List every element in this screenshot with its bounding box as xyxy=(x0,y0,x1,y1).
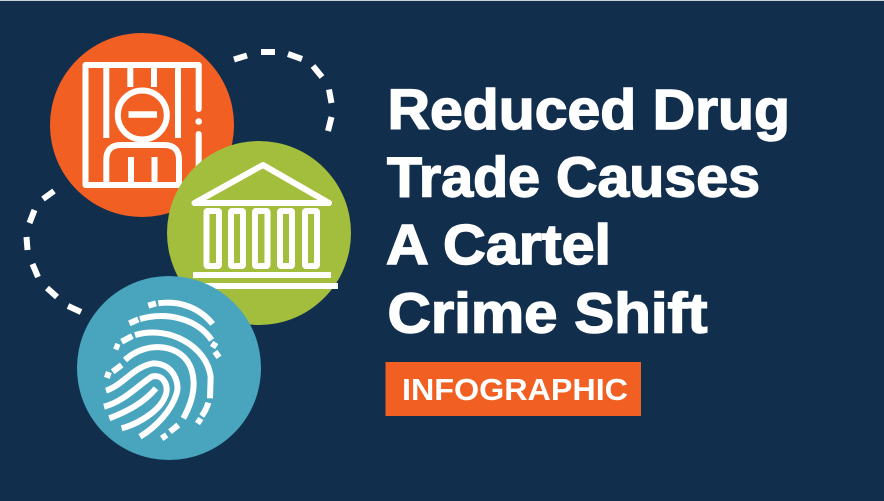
dashed arc: left xyxy=(26,191,81,312)
title: Crime Shift xyxy=(388,282,708,346)
icon: orange circle with prisoner behind bars xyxy=(50,33,234,217)
icon: green circle with courthouse xyxy=(167,141,351,325)
title: Trade Causes xyxy=(387,146,760,210)
title: A Cartel xyxy=(386,213,611,277)
dashed arc: top right xyxy=(234,52,332,131)
badge: infographic: INFOGRAPHIC xyxy=(402,373,628,407)
icon: cell door dot xyxy=(195,118,202,125)
icon: blue circle with fingerprint xyxy=(77,276,261,460)
title: Reduced Drug xyxy=(388,78,790,142)
title xyxy=(386,78,790,346)
badge: infographic xyxy=(386,362,641,416)
